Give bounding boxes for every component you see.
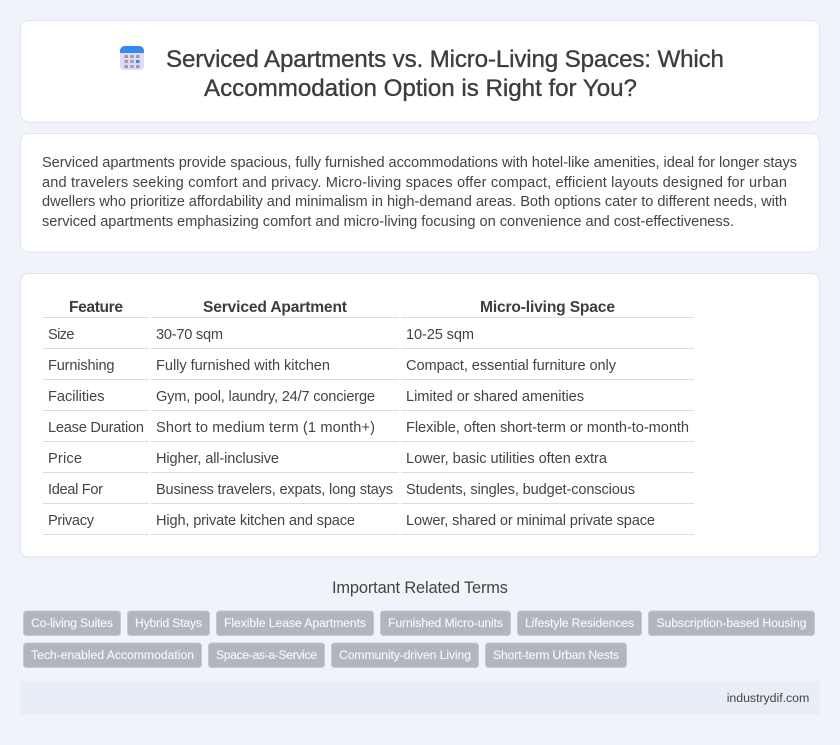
table row: privacy: Lower, shared or minimal private space [406, 513, 655, 529]
table row: privacy [43, 513, 694, 535]
table row: furnishing: Fully furnished with kitchen [156, 358, 330, 374]
table row: facilities: Limited or shared amenities [406, 389, 584, 405]
panel: comparison table [20, 274, 820, 557]
table row: price: Higher, all-inclusive [156, 451, 279, 467]
table row: ideal for: Students, singles, budget-conscious [406, 482, 635, 498]
table row: ideal for [43, 482, 694, 504]
tag: co-living suites: Co-living Suites [31, 616, 113, 630]
tag: space-as-a-service [208, 643, 324, 668]
table row: facilities: Facilities [48, 389, 104, 405]
tag: lifestyle residences [518, 611, 642, 636]
footer source text: industrydif.com [727, 691, 809, 705]
panel: introduction [20, 134, 820, 252]
tag: short-term urban nests: Short-term Urban Nests [493, 648, 619, 662]
tag: flexible lease apartments: Flexible Lease Apartments [224, 616, 366, 630]
intro text block: dwellers who prioritize affordability and minimalism in high-demand areas. Both options cater to different needs, with [42, 194, 787, 210]
table row: furnishing: Furnishing [48, 358, 114, 374]
table row: lease duration: Short to medium term (1 month+) [156, 420, 375, 436]
table row: privacy: High, private kitchen and space [156, 513, 355, 529]
table row: price: Price [48, 451, 82, 467]
tag: subscription-based housing [648, 611, 814, 636]
panel: header [20, 20, 820, 122]
heading: important related terms: Important Related Terms [332, 579, 508, 597]
table row: lease duration [43, 420, 694, 442]
tag: lifestyle residences: Lifestyle Residences [525, 616, 634, 630]
table row: facilities: Gym, pool, laundry, 24/7 concierge [156, 389, 375, 405]
tag: flexible lease apartments [216, 611, 374, 636]
table row: furnishing [43, 358, 694, 380]
table row: ideal for: Business travelers, expats, long stays [156, 482, 393, 498]
table header row: Micro-living Space [480, 299, 615, 316]
table row: furnishing: Compact, essential furniture only [406, 358, 617, 374]
table header row: Serviced Apartment [203, 299, 347, 316]
table row: privacy: Privacy [48, 513, 95, 529]
table row: size: Size [48, 327, 74, 343]
intro text block [42, 155, 797, 230]
intro text block: and travelers seeking comfort and privacy. Micro-living spaces offer compact, efficient layouts designed for urban [42, 175, 787, 191]
table row: price: Lower, basic utilities often extra [406, 451, 608, 467]
tag: furnished micro-units [380, 611, 510, 636]
related terms tags [24, 611, 814, 668]
table row: facilities [43, 389, 694, 411]
tag: co-living suites [24, 611, 120, 636]
tag: community-driven living: Community-driven Living [339, 648, 471, 662]
intro text block: serviced apartments emphasizing comfort and micro-living focusing on convenience and cost-effectiveness. [42, 214, 734, 230]
table row: size [43, 327, 694, 349]
table header row: Feature [69, 299, 123, 316]
tag: community-driven living [332, 643, 478, 668]
table row: size: 30-70 sqm [156, 327, 223, 343]
title: Serviced Apartments vs. Micro-Living Spaces: Which [166, 46, 724, 73]
title: Accommodation Option is Right for You? [204, 75, 637, 102]
tag: tech-enabled accommodation [24, 643, 202, 668]
table row: lease duration: Flexible, often short-term or month-to-month [406, 420, 689, 436]
table header row [43, 299, 694, 318]
tag: hybrid stays: Hybrid Stays [135, 616, 202, 630]
tag: tech-enabled accommodation: Tech-enabled Accommodation [31, 648, 194, 662]
table row: ideal for: Ideal For [48, 482, 103, 498]
table row: price [43, 451, 694, 473]
tag: subscription-based housing: Subscription-based Housing [656, 616, 806, 630]
table row: lease duration: Lease Duration [48, 420, 144, 436]
footer bar [20, 681, 820, 714]
table row: size: 10-25 sqm [406, 327, 474, 343]
tag: space-as-a-service: Space-as-a-Service [216, 648, 317, 662]
intro text block: Serviced apartments provide spacious, fully furnished accommodations with hotel-like amenities, ideal for longer stays [42, 155, 797, 171]
tag: furnished micro-units: Furnished Micro-units [388, 616, 503, 630]
tag: hybrid stays [128, 611, 210, 636]
tag: short-term urban nests [486, 643, 626, 668]
icon: calendar [120, 46, 144, 70]
title [166, 46, 724, 102]
